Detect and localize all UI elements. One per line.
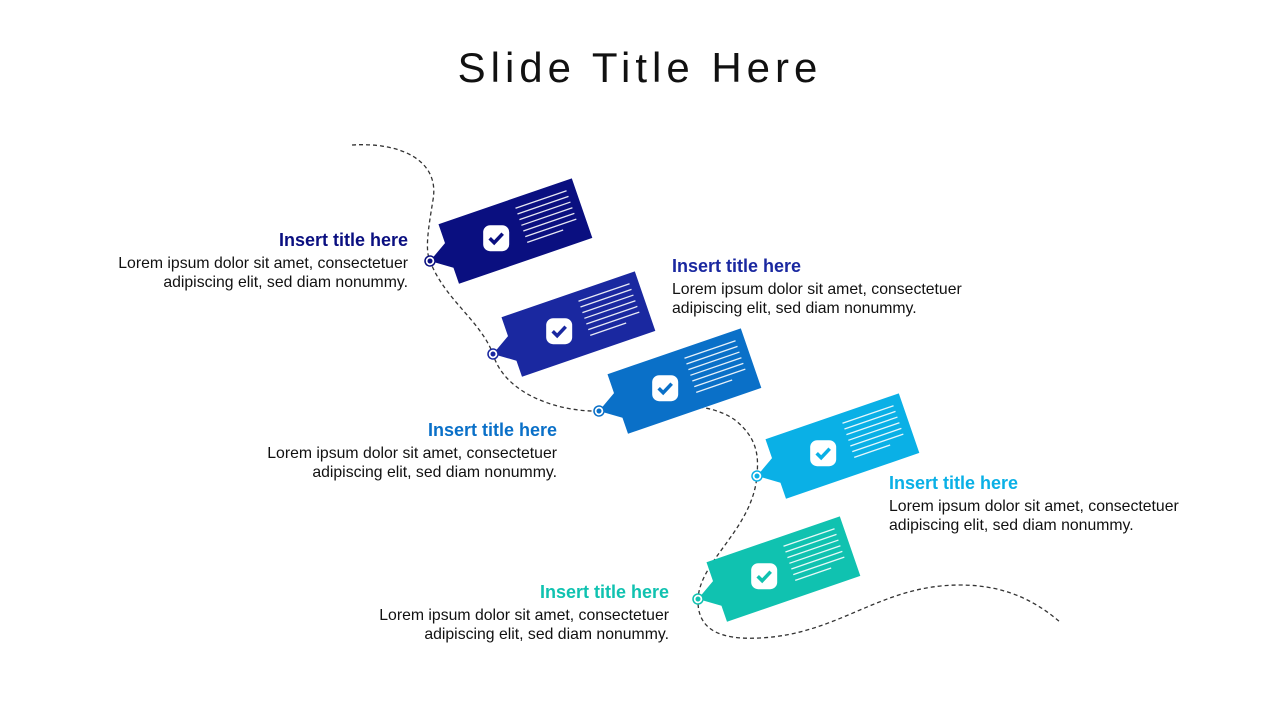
text block 1: Insert title here xyxy=(279,230,408,250)
tag 2 xyxy=(478,271,655,385)
text block 5 xyxy=(379,582,669,643)
text block 2 xyxy=(672,256,962,317)
text block 1: adipiscing elit, sed diam nonummy. xyxy=(163,274,408,291)
text block 2: Insert title here xyxy=(672,256,801,276)
dashed path xyxy=(352,145,1060,638)
text block 4: Insert title here xyxy=(889,473,1018,493)
text block 5: adipiscing elit, sed diam nonummy. xyxy=(424,626,669,643)
text block 1 xyxy=(118,230,408,291)
text block 4 xyxy=(889,473,1179,534)
text block 3: Insert title here xyxy=(428,420,557,440)
tag 3 xyxy=(584,328,761,442)
text block 1: Lorem ipsum dolor sit amet, consectetuer xyxy=(118,255,408,272)
text block 4: Lorem ipsum dolor sit amet, consectetuer xyxy=(889,498,1179,515)
title: Slide Title Here xyxy=(458,44,822,91)
text block 3: adipiscing elit, sed diam nonummy. xyxy=(312,464,557,481)
text block 5: Insert title here xyxy=(540,582,669,602)
text block 2: adipiscing elit, sed diam nonummy. xyxy=(672,300,917,317)
text block 2: Lorem ipsum dolor sit amet, consectetuer xyxy=(672,281,962,298)
text block 5: Lorem ipsum dolor sit amet, consectetuer xyxy=(379,607,669,624)
text block 3: Lorem ipsum dolor sit amet, consectetuer xyxy=(267,445,557,462)
text block 3 xyxy=(267,420,557,481)
tag 1 xyxy=(415,178,592,292)
text block 4: adipiscing elit, sed diam nonummy. xyxy=(889,517,1134,534)
tag 5 xyxy=(683,516,860,630)
tag 4 xyxy=(742,393,919,507)
